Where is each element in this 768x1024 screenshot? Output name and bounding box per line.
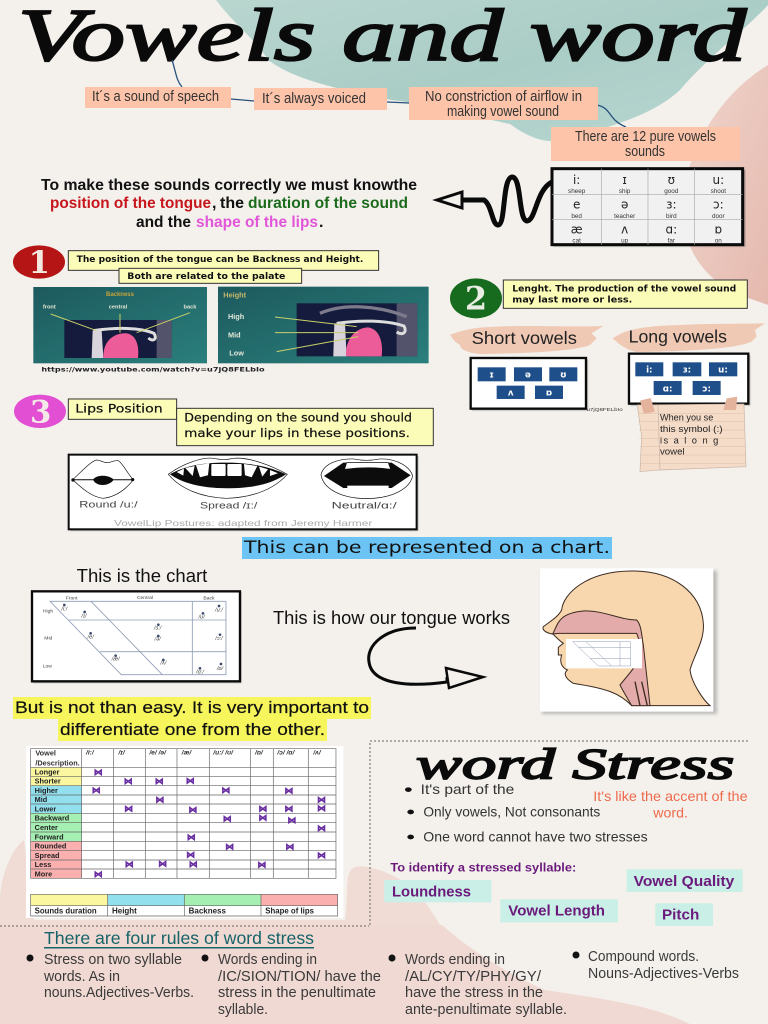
note: long vowel symbol	[637, 397, 746, 472]
heading: this is the chart: This is the chart	[77, 565, 208, 586]
table headers: /ɪ/	[117, 750, 126, 757]
table marks	[92, 767, 326, 879]
vowel symbols table: good	[664, 188, 679, 195]
rule 3: ante-penultimate syllable.	[405, 1001, 567, 1018]
rule 4: Compound words.	[588, 948, 699, 965]
heading: four rules: There are four rules of word stress	[44, 928, 314, 948]
note: long vowel symbol: is a l o n g	[660, 435, 718, 445]
lips: neutral: Neutral/ɑ:/	[332, 501, 397, 511]
callout: palate	[119, 268, 302, 283]
stress bullet list: One word cannot have two stresses	[423, 828, 648, 844]
table marks: ⋈	[92, 785, 101, 795]
callout: lips position	[68, 399, 177, 419]
vowel symbols table: ship	[619, 188, 631, 195]
panel: long vowel symbols	[629, 354, 750, 406]
diagram: backness	[33, 287, 207, 363]
vowel quadrilateral chart: Back	[203, 595, 215, 601]
section 3: lips position	[14, 394, 433, 531]
vowel chart section	[32, 565, 241, 683]
table marks: ⋈	[94, 869, 103, 879]
callout: palate: Both are related to the palate	[127, 272, 285, 282]
vowel quadrilateral chart: Mid	[44, 636, 53, 642]
tag: loudness: Loundness	[392, 885, 471, 901]
diagram: height: Height	[223, 290, 247, 299]
fact box: sound of speech: It´s a sound of speech	[92, 89, 219, 105]
table headers: /e/ /ə/	[148, 750, 167, 757]
table headers: /i:/	[85, 750, 95, 757]
callout: depending on the sound	[177, 408, 433, 446]
vowel description table	[26, 746, 343, 918]
diagram: backness: Backness	[106, 292, 135, 298]
note: long vowel symbol: When you se	[660, 413, 713, 423]
vowel quadrilateral chart: High	[43, 608, 53, 614]
vowel symbols table: ɑ:	[665, 222, 677, 236]
table legend: Backness	[189, 906, 226, 915]
rule 4: Nouns-Adjectives-Verbs	[588, 965, 739, 982]
vowel symbols table: sheep	[568, 188, 586, 195]
tag: vowel quality: Vowel Quality	[634, 874, 735, 890]
note: accent: word.	[652, 805, 688, 821]
rule 3: Words ending in	[405, 951, 505, 968]
table row labels: Less	[35, 860, 51, 869]
vowel symbols table: shoot	[711, 188, 726, 195]
vowel symbols table: e	[573, 198, 580, 212]
vowel symbols table: i:	[573, 173, 580, 187]
rule 3	[388, 951, 567, 1018]
rule 3: /AL/CY/TY/PHY/GY/	[405, 968, 542, 985]
intro text: duration of the sound	[248, 195, 408, 212]
section 2: length	[450, 278, 765, 472]
table marks: ⋈	[189, 859, 198, 869]
note: accent: It's like the accent of the	[593, 788, 748, 804]
badge 1: 1	[29, 245, 50, 281]
connector lines	[172, 60, 626, 127]
callout: length: Lenght. The production of the vowel sound	[512, 285, 736, 295]
panel: short vowel symbols: ɪ	[489, 371, 494, 381]
arrow: squiggle to text	[437, 177, 552, 225]
word stress section	[384, 740, 748, 926]
label: short vowels: Short vowels	[472, 328, 577, 348]
rule 1	[26, 951, 194, 1001]
intro text: To make these sounds correctly we must knowthe	[41, 177, 417, 194]
badge 3	[14, 394, 66, 430]
table marks: ⋈	[285, 804, 294, 814]
heading: chart highlight: This can be represented on a chart.	[243, 538, 610, 558]
intro text: the	[220, 195, 244, 212]
vowel quadrilateral chart: /ɑ:/	[195, 669, 205, 675]
diagram: height: High	[228, 312, 245, 321]
panel: lip shapes	[69, 455, 418, 531]
vowel symbols table: u:	[712, 173, 724, 187]
vowel symbols table: teacher	[614, 213, 635, 220]
table headers: /Description.	[35, 758, 80, 767]
vowel symbols table: up	[621, 238, 629, 245]
table marks: ⋈	[94, 767, 103, 777]
table row labels	[35, 768, 69, 878]
table marks: ⋈	[189, 804, 198, 814]
table marks: ⋈	[317, 803, 326, 813]
intro text: position of the tongue	[50, 195, 211, 212]
note: long vowel symbol: this symbol (:)	[660, 424, 723, 434]
vowel quadrilateral chart: /æ/	[111, 656, 121, 662]
tag: pitch	[655, 903, 713, 926]
lips: round	[71, 460, 138, 509]
intro text: and the	[136, 214, 191, 231]
table row labels: Lower	[35, 804, 56, 813]
intro text: ,	[212, 195, 216, 212]
label: short vowels	[450, 326, 603, 354]
panel: long vowel symbols: ɜ:	[683, 366, 691, 376]
vowel quadrilateral chart: /ɜ:/	[153, 626, 163, 632]
table marks: ⋈	[124, 804, 133, 814]
table marks: ⋈	[158, 859, 167, 869]
callout: length: may last more or less.	[512, 296, 632, 306]
table marks: ⋈	[155, 776, 164, 786]
source url: https://www.youtube.com/watch?v=u7jQ8FELbIo	[41, 366, 265, 373]
table marks: ⋈	[223, 813, 232, 823]
table marks: ⋈	[317, 795, 326, 805]
label: long vowels: Long vowels	[629, 326, 727, 346]
rule 4	[572, 948, 739, 982]
vowel quadrilateral chart: Low	[43, 664, 52, 670]
panel: long vowel symbols: ɔ:	[702, 384, 711, 394]
fact box: always voiced: It´s always voiced	[262, 91, 366, 107]
intro text: shape of the lips	[196, 214, 318, 231]
diagram: height: Mid	[228, 330, 241, 339]
note: accent	[593, 788, 748, 821]
tag: loudness	[384, 880, 491, 902]
badge 1	[13, 245, 65, 281]
vowel symbols table: door	[712, 213, 725, 220]
vowel symbols table: ə	[621, 198, 628, 212]
table headers: Vowel	[35, 749, 56, 758]
table legend	[31, 894, 338, 916]
vowel symbols table: on	[715, 238, 722, 245]
vowel quadrilateral chart: Front	[66, 596, 78, 602]
vowel symbols table: ɔ:	[713, 198, 724, 212]
table headers: /ɔ/ /ɑ/	[276, 750, 295, 757]
diagram: backness: front	[43, 304, 56, 310]
panel: short vowel symbols: ʌ	[508, 389, 514, 399]
diagram: height: Low	[229, 349, 244, 358]
panel: short vowel symbols: ɒ	[546, 389, 552, 399]
table marks: ⋈	[258, 859, 267, 869]
table row labels: Shorter	[35, 777, 61, 786]
table marks: ⋈	[186, 850, 195, 860]
stress bullet list: Only vowels, Not consonants	[423, 804, 600, 820]
panel: short vowel symbols	[471, 358, 623, 412]
stress bullet list: It's part of the	[421, 781, 515, 797]
vowel symbols table: cat	[572, 238, 581, 245]
callout: depending on the sound: Depending on the sound you should	[184, 411, 412, 425]
vowel symbols table: ɪ	[622, 173, 627, 187]
tag: vowel quality	[627, 869, 743, 892]
vowel quadrilateral chart: /u:/	[214, 607, 224, 613]
label: long vowels	[613, 323, 765, 352]
panel: short vowel symbols: ə	[525, 371, 531, 381]
vowel symbols table: ɒ	[715, 222, 722, 236]
table headers: /ɒ/	[254, 750, 264, 757]
fact box: 12 pure vowels	[551, 127, 740, 161]
table marks: ⋈	[222, 785, 231, 795]
subheading: stressed syllable: To identify a stressed syllable:	[390, 861, 576, 875]
vowel quadrilateral chart: /ə/	[154, 636, 162, 642]
table marks: ⋈	[156, 795, 165, 805]
row colour bands	[31, 767, 82, 878]
table legend: Shape of lips	[265, 906, 315, 915]
fact box: always voiced	[254, 88, 387, 110]
table row labels: Mid	[35, 795, 47, 804]
rule 2: Words ending in	[218, 951, 317, 968]
highlighted warning	[13, 697, 371, 741]
highlighted warning: But is not than easy. It is very important to	[15, 698, 369, 717]
lips: neutral	[321, 459, 413, 511]
vowel quadrilateral chart: /ɪ/	[80, 613, 88, 619]
table headers: /u:/ /ʊ/	[212, 750, 234, 757]
rule 2: /IC/SION/TION/ have the	[218, 968, 381, 985]
intro text	[41, 177, 417, 231]
stress bullet list	[405, 781, 648, 844]
badge 2: 2	[465, 280, 487, 318]
rule 1: Stress on two syllable	[44, 951, 182, 968]
badge 2	[450, 278, 502, 318]
panel: long vowel symbols: ɑ:	[663, 384, 672, 394]
fact box: no constriction: No constriction of airflow in	[425, 89, 582, 105]
rule 1: words. As in	[43, 968, 120, 985]
curved arrow	[369, 628, 483, 688]
table marks: ⋈	[259, 804, 268, 814]
table row labels: Backward	[35, 814, 69, 823]
table marks: ⋈	[286, 841, 295, 851]
diagram: backness: back	[184, 305, 197, 311]
vowel quadrilateral chart: /ɔ:/	[214, 636, 224, 642]
callout: depending on the sound: make your lips in these positions.	[184, 426, 410, 440]
highlighted warning: differentiate one from the other.	[60, 720, 325, 739]
tag: pitch: Pitch	[662, 907, 699, 923]
vowel quadrilateral chart: /e/	[87, 634, 95, 640]
word stress dotted frame	[0, 741, 750, 926]
tag: vowel length: Vowel Length	[508, 904, 605, 920]
table legend: Sounds duration	[35, 906, 97, 915]
table marks: ⋈	[285, 785, 294, 795]
table legend: Height	[112, 906, 137, 915]
fact box: 12 pure vowels: There are 12 pure vowels	[575, 129, 716, 145]
vowel symbols table	[552, 169, 745, 247]
panel: long vowel symbols: u:	[718, 366, 728, 376]
table headers: /ʌ/	[312, 750, 322, 757]
table marks: ⋈	[317, 823, 326, 833]
section 1: tongue position	[13, 245, 429, 373]
vowel symbols table: bird	[666, 213, 677, 220]
table headers: /æ/	[181, 750, 192, 757]
table marks: ⋈	[124, 776, 133, 786]
panel: short vowel symbols: ʊ	[560, 371, 567, 381]
lips: spread	[168, 458, 287, 510]
vowel quadrilateral chart	[32, 591, 241, 683]
callout: length	[503, 280, 747, 308]
rule 1: nouns.Adjectives-Verbs.	[44, 984, 194, 1001]
table row labels: Rounded	[35, 842, 66, 851]
table row labels: Center	[35, 823, 58, 832]
fact box: 12 pure vowels: sounds	[625, 144, 665, 160]
tag: vowel length	[500, 899, 618, 922]
intro text: .	[319, 214, 323, 231]
fact box: no constriction: making vowel sound	[447, 104, 559, 120]
text: tongue works: This is how our tongue works	[273, 607, 510, 628]
table headers	[35, 749, 322, 767]
table marks: ⋈	[225, 842, 234, 852]
lips: spread: Spread /ɪ:/	[200, 500, 258, 510]
callout: backness and height	[68, 251, 379, 270]
panel: long vowel symbols: i:	[646, 366, 653, 376]
rule 2: stress in the penultimate	[218, 984, 376, 1001]
vowel quadrilateral chart: Central	[137, 595, 153, 601]
vowel symbols table: ɜ:	[666, 198, 677, 212]
head diagram	[540, 568, 717, 714]
diagram: height	[218, 287, 429, 363]
table marks: ⋈	[259, 812, 268, 822]
vowel symbols table: far	[668, 238, 675, 245]
callout: lips position: Lips Position	[75, 402, 163, 416]
table row labels: Higher	[35, 786, 58, 795]
vowel symbols table: ʌ	[621, 222, 628, 236]
table marks: ⋈	[125, 859, 134, 869]
table row labels: Forward	[35, 832, 64, 841]
table marks: ⋈	[317, 850, 326, 860]
vowel symbols table: ʊ	[668, 173, 675, 187]
callout: backness and height: The position of the tongue can be Backness and Height.	[77, 255, 363, 265]
rule 3: have the stress in the	[405, 984, 543, 1001]
heading: word stress: word Stress	[416, 740, 734, 788]
table row labels: Longer	[35, 768, 60, 777]
rule 2	[202, 951, 381, 1018]
diagram: backness: central	[109, 305, 128, 311]
table row labels: Spread	[35, 851, 60, 860]
table row labels: More	[35, 869, 52, 878]
vowel symbols table: æ	[571, 222, 583, 236]
vowel quadrilateral chart: /ɒ/	[216, 666, 225, 672]
panel: short vowel symbols: u7jQ8FELbIo	[587, 407, 623, 412]
table marks: ⋈	[187, 832, 196, 842]
vowel quadrilateral chart: /ʌ/	[159, 661, 168, 667]
vowel quadrilateral chart: /i:/	[60, 607, 69, 613]
lips: round: Round /u:/	[79, 499, 138, 509]
vowel symbols table: bed	[571, 213, 582, 220]
lips caption: VowelLip Postures: adapted from Jeremy Harmer	[114, 518, 372, 528]
table marks: ⋈	[288, 815, 297, 825]
badge 3: 3	[30, 394, 51, 430]
note: long vowel symbol: vowel	[660, 447, 685, 457]
table marks: ⋈	[186, 775, 195, 785]
vowel quadrilateral chart: /ʊ/	[197, 614, 206, 620]
fact box: no constriction	[409, 87, 598, 120]
rule 2: syllable.	[218, 1001, 268, 1018]
